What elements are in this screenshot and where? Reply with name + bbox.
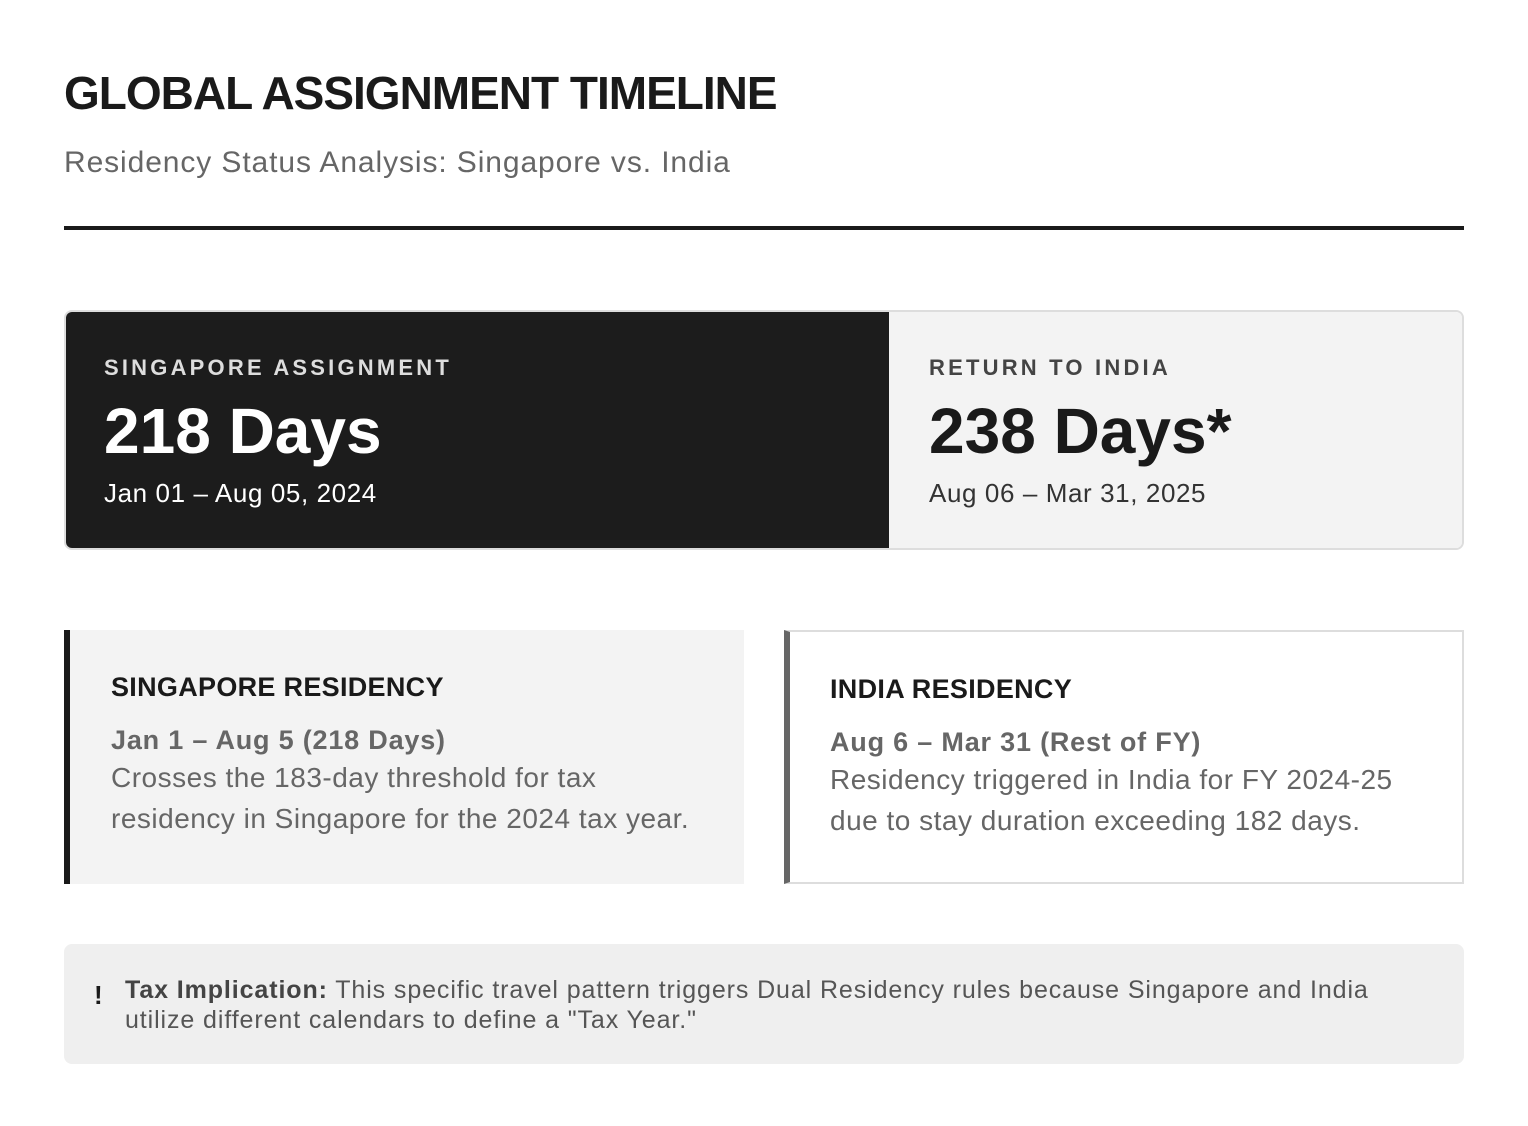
segment: singapore: Jan 01 – Aug 05, 2024 [104, 478, 377, 508]
panel: singapore residency: residency in Singapore for the 2024 tax year. [111, 803, 689, 834]
segment: singapore: 218 Days [104, 395, 382, 467]
title: GLOBAL ASSIGNMENT TIMELINE [64, 67, 777, 119]
panel: india residency: due to stay duration exceeding 182 days. [830, 805, 1361, 836]
panel: india residency: Aug 6 – Mar 31 (Rest of FY) [830, 727, 1201, 757]
segment: singapore: SINGAPORE ASSIGNMENT [104, 355, 452, 380]
panel: singapore residency: Jan 1 – Aug 5 (218 Days) [111, 725, 446, 755]
segment: india: RETURN TO INDIA [929, 355, 1171, 380]
panel: singapore residency: Crosses the 183-day threshold for tax [111, 762, 596, 793]
panel: india residency: INDIA RESIDENCY [830, 674, 1072, 704]
panel: india residency [784, 630, 1464, 884]
panel: timeline bar [64, 310, 1464, 550]
panel: india residency: Residency triggered in India for FY 2024-25 [830, 764, 1393, 795]
subtitle: Residency Status Analysis: Singapore vs. India [64, 146, 731, 179]
callout: tax implication: Tax Implication: This specific travel pattern triggers Dual Residency rules because Singapore and India [125, 976, 1369, 1004]
segment: singapore [64, 310, 889, 550]
icon: exclamation: ! [94, 980, 103, 1010]
segment: india: 238 Days* [929, 395, 1231, 467]
segment: india [889, 310, 1468, 550]
callout: tax implication: utilize different calendars to define a "Tax Year." [125, 1006, 697, 1034]
segment: india: Aug 06 – Mar 31, 2025 [929, 478, 1206, 508]
callout: tax implication [64, 944, 1464, 1064]
panel: singapore residency: SINGAPORE RESIDENCY [111, 672, 444, 702]
panel: singapore residency [64, 630, 744, 884]
